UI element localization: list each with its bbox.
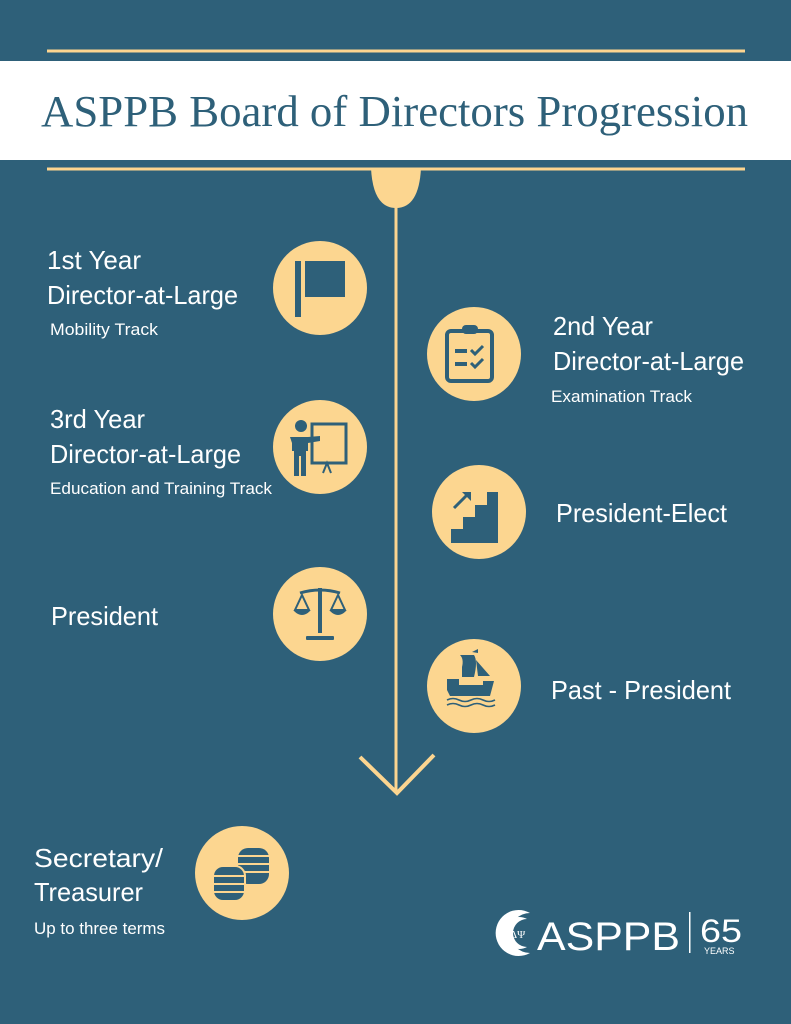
step: 3rd Year: Education and Training Track xyxy=(50,479,273,498)
step: Past - President: Past - President xyxy=(551,675,732,705)
title banner xyxy=(0,61,791,160)
step: 1st Year: Director-at-Large xyxy=(47,280,238,310)
step: 3rd Year xyxy=(50,404,273,498)
step: 1st Year: 1st Year xyxy=(47,245,141,275)
step: Secretary/Treasurer xyxy=(34,843,165,938)
step: Secretary/Treasurer: Secretary/ xyxy=(34,843,164,873)
logo: ASPPB 65 years: YEARS xyxy=(704,946,735,956)
step: Secretary/Treasurer: Up to three terms xyxy=(34,919,165,938)
icon: coins xyxy=(195,826,289,920)
logo: ASPPB 65 years: ΔΨ xyxy=(510,929,526,941)
logo: ASPPB 65 years xyxy=(496,910,742,959)
icon: ship xyxy=(427,639,521,733)
step: President: President xyxy=(51,601,159,631)
step: President-Elect: President-Elect xyxy=(556,498,728,528)
step: 2nd Year: 2nd Year xyxy=(553,311,653,341)
icon: flag xyxy=(273,241,367,335)
icon: scales xyxy=(273,567,367,661)
step: 2nd Year: Examination Track xyxy=(551,387,692,406)
icon: presenter xyxy=(273,400,367,494)
step: 3rd Year: Director-at-Large xyxy=(50,439,241,469)
logo: ASPPB 65 years: 65 xyxy=(700,913,742,949)
timeline arrow xyxy=(360,168,434,793)
step: 3rd Year: 3rd Year xyxy=(50,404,145,434)
step: 1st Year: Mobility Track xyxy=(50,320,159,339)
icon: clipboard xyxy=(427,307,521,401)
step: 2nd Year xyxy=(551,311,744,406)
logo: ASPPB 65 years: ASPPB xyxy=(537,915,680,959)
title: ASPPB Board of Directors Progression xyxy=(41,87,748,136)
step: Secretary/Treasurer: Treasurer xyxy=(34,877,143,907)
step: 1st Year xyxy=(47,245,238,339)
step: 2nd Year: Director-at-Large xyxy=(553,346,744,376)
icon: stairs xyxy=(432,465,526,559)
